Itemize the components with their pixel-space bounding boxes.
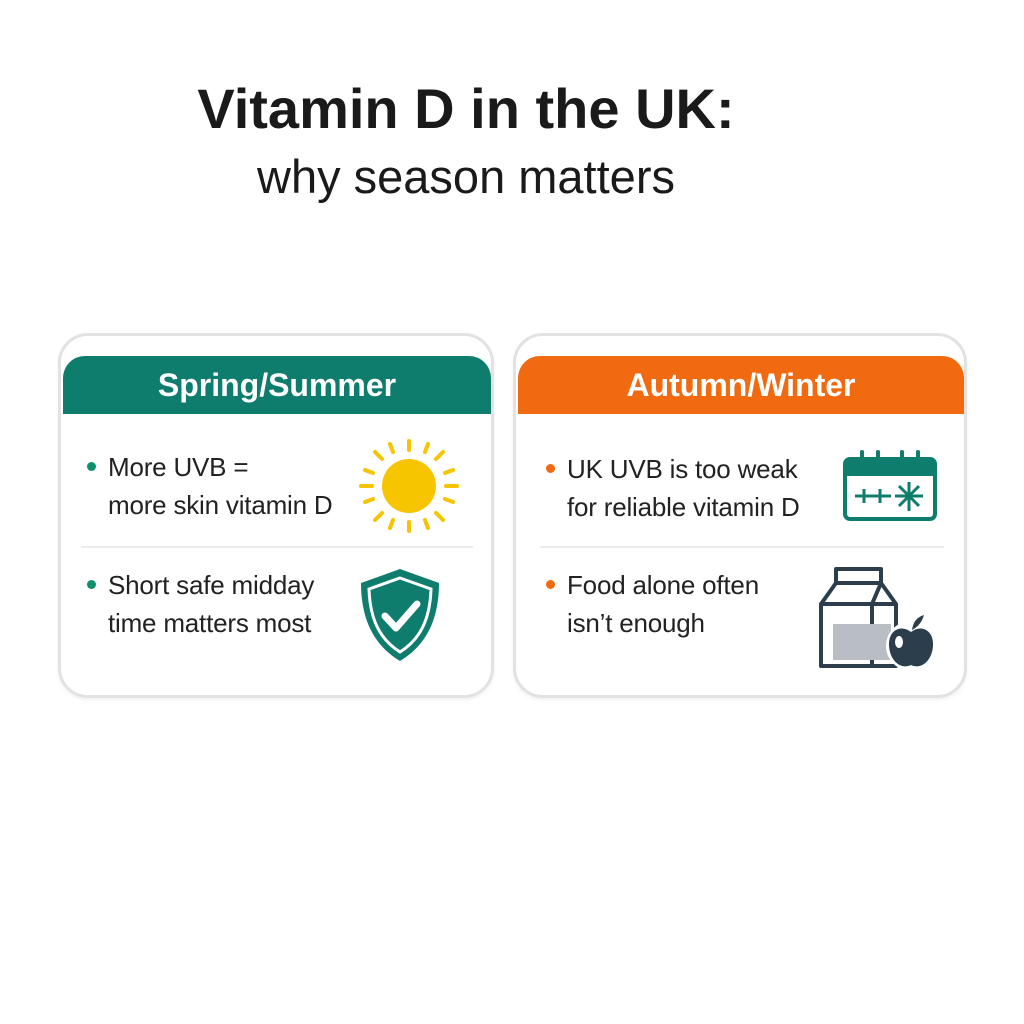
text: more UVB: more skin vitamin D [108, 490, 332, 520]
text: UK UVB too weak: for reliable vitamin D [567, 492, 800, 522]
text: food alone: isn’t enough [567, 608, 705, 638]
text: food alone: Food alone often [567, 570, 759, 600]
title: why season matters [257, 150, 675, 203]
panel: spring/summer [58, 333, 494, 698]
panel: autumn/winter [513, 333, 967, 698]
title: Vitamin D in the UK: [197, 77, 735, 140]
text: UK UVB too weak: UK UVB is too weak [567, 454, 798, 484]
text: short safe midday [87, 570, 314, 638]
text: more UVB [87, 452, 332, 520]
title [197, 77, 735, 203]
text: short safe midday: Short safe midday [108, 570, 314, 600]
icon: sun [359, 439, 459, 533]
header: autumn/winter [518, 356, 964, 414]
header: autumn/winter: Autumn/Winter [626, 367, 856, 403]
header: spring/summer: Spring/Summer [158, 367, 396, 403]
text: food alone [546, 570, 759, 638]
text: short safe midday: time matters most [108, 608, 311, 638]
icon: calendar snowflake [843, 450, 937, 521]
icon: milk carton and apple [819, 567, 934, 668]
text: UK UVB too weak [546, 454, 800, 522]
icon: shield [361, 569, 439, 661]
header: spring/summer [63, 356, 491, 414]
text: more UVB: More UVB = [108, 452, 248, 482]
